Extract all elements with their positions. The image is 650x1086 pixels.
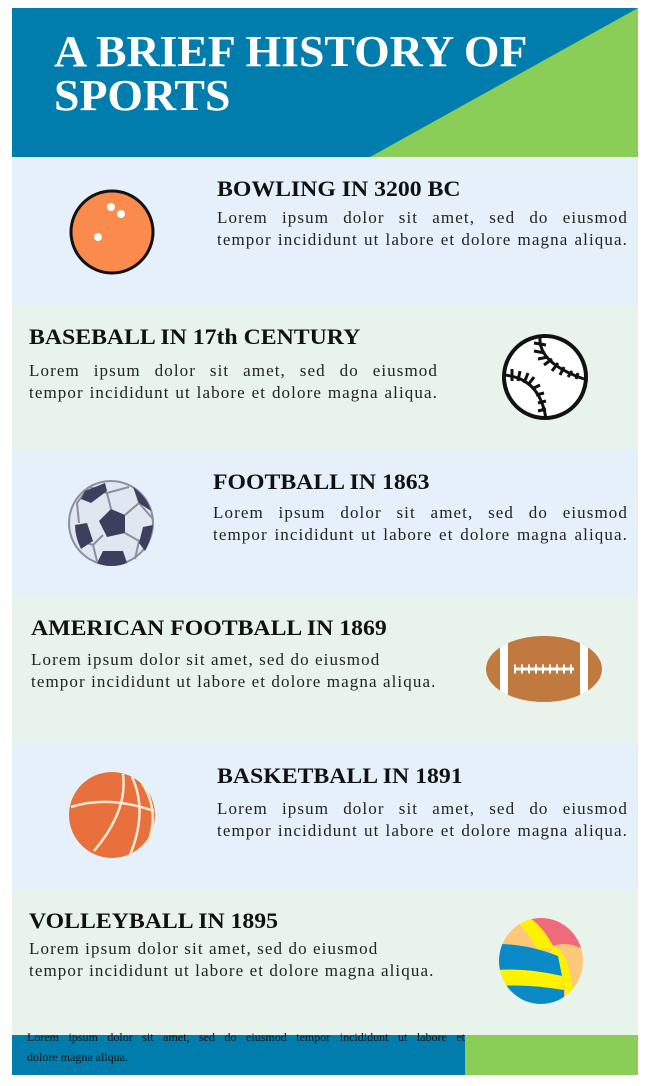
panel: basketball [12,742,638,890]
text: Lorem ipsum dolor sit amet, sed do eiusmod [217,208,628,227]
footer bar [12,1030,638,1075]
panel: baseball [12,305,638,450]
text: tempor incididunt ut labore et dolore magna aliqua. [213,525,628,544]
text: tempor incididunt ut labore et dolore magna aliqua. [29,961,434,980]
text [29,361,438,402]
text: tempor incididunt ut labore et dolore magna aliqua. [217,230,628,249]
text: Lorem ipsum dolor sit amet, sed do eiusmod [31,650,380,669]
title: A BRIEF HISTORY OF [54,27,527,76]
header banner [12,8,638,157]
text: Lorem ipsum dolor sit amet, sed do eiusmod [29,939,378,958]
footer text: dolore magna aliqua. [27,1050,128,1064]
panel: bowling [12,157,638,305]
text [213,503,628,544]
title [54,27,527,120]
text: Lorem ipsum dolor sit amet, sed do eiusmod [213,503,628,522]
icon: basketball [69,772,155,858]
text: Lorem ipsum dolor sit amet, sed do eiusmod [29,361,438,380]
panel: volleyball [12,890,638,1035]
heading: BASEBALL IN 17th CENTURY [29,324,360,349]
icon: volleyball [499,918,583,1004]
text: tempor incididunt ut labore et dolore magna aliqua. [217,821,628,840]
heading: VOLLEYBALL IN 1895 [29,908,278,933]
text: Lorem ipsum dolor sit amet, sed do eiusmod [217,799,628,818]
icon: bowling ball [70,190,154,274]
panel: football [12,450,638,597]
title: SPORTS [54,71,230,120]
icon: soccer ball [68,480,154,566]
text [29,939,434,980]
footer text: Lorem ipsum dolor sit amet, sed do eiusmod tempor incididunt ut labore et [27,1030,465,1044]
heading: FOOTBALL IN 1863 [213,469,430,494]
heading: AMERICAN FOOTBALL IN 1869 [31,615,387,640]
text: tempor incididunt ut labore et dolore magna aliqua. [31,672,436,691]
text [31,650,436,691]
footer text [27,1030,465,1064]
text [217,799,628,840]
heading: BASKETBALL IN 1891 [217,763,463,788]
text [217,208,628,249]
icon: american football [486,636,602,702]
icon: baseball [502,334,588,420]
text: tempor incididunt ut labore et dolore magna aliqua. [29,383,438,402]
heading: BOWLING IN 3200 BC [217,176,461,201]
panel: american football [12,597,638,742]
